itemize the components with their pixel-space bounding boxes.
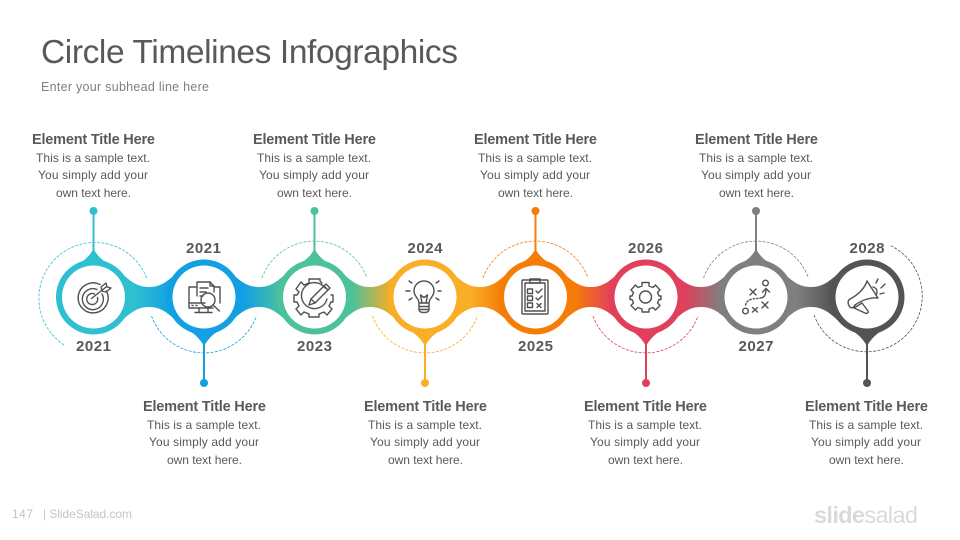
icon: strategy play xyxy=(743,280,770,314)
node 7 xyxy=(718,207,794,334)
icon: monitor with magnifier xyxy=(189,282,220,312)
text block 1 xyxy=(32,132,155,200)
text block 2 xyxy=(143,399,266,467)
text block 7: own text here. xyxy=(719,186,794,200)
icon: checklist clipboard xyxy=(522,279,548,314)
year labels: 2024 xyxy=(408,240,443,257)
text block 4: This is a sample text. xyxy=(368,418,482,432)
connector band xyxy=(122,273,838,321)
text block 1: This is a sample text. xyxy=(36,151,150,165)
text block 6: You simply add your xyxy=(590,435,700,449)
text block 3: You simply add your xyxy=(259,168,369,182)
text block 6 xyxy=(584,399,707,467)
text block 6: own text here. xyxy=(608,453,683,467)
text block 7 xyxy=(695,132,818,200)
icon: target xyxy=(78,283,111,313)
text block 4: own text here. xyxy=(388,453,463,467)
text block 5: Element Title Here xyxy=(474,132,597,148)
footer page number and site: | SlideSalad.com xyxy=(43,507,132,521)
dashed arcs xyxy=(39,241,922,353)
node 4 xyxy=(388,260,462,387)
subhead: Enter your subhead line here xyxy=(41,80,209,94)
text block 4: You simply add your xyxy=(370,435,480,449)
text block 4: Element Title Here xyxy=(364,399,487,415)
text block 8: own text here. xyxy=(829,453,904,467)
text block 8: This is a sample text. xyxy=(809,418,923,432)
logo wordmark: slidesalad xyxy=(814,502,918,528)
text block 5: This is a sample text. xyxy=(478,151,592,165)
text block 6: This is a sample text. xyxy=(588,418,702,432)
node 6 xyxy=(608,260,684,387)
year labels: 2025 xyxy=(518,338,553,355)
text block 1: Element Title Here xyxy=(32,132,155,148)
icon: light bulb xyxy=(406,281,441,312)
text block 1: You simply add your xyxy=(38,168,148,182)
text block 5: You simply add your xyxy=(480,168,590,182)
text block 2: You simply add your xyxy=(149,435,259,449)
text block 2: This is a sample text. xyxy=(147,418,261,432)
text block 1: own text here. xyxy=(56,186,131,200)
icon: gear with pencil xyxy=(294,279,333,317)
text block 2: own text here. xyxy=(167,453,242,467)
text block 3: Element Title Here xyxy=(253,132,376,148)
text block 8 xyxy=(805,399,928,467)
footer page number and site: 147 xyxy=(12,507,33,521)
node 8 xyxy=(830,260,904,387)
year labels: 2023 xyxy=(297,338,332,355)
year labels: 2027 xyxy=(738,338,774,355)
year labels: 2026 xyxy=(628,240,663,257)
year labels xyxy=(76,240,884,355)
icon: megaphone xyxy=(848,279,885,313)
text block 8: You simply add your xyxy=(811,435,921,449)
text block 6: Element Title Here xyxy=(584,399,707,415)
text block 5: own text here. xyxy=(498,186,573,200)
text block 3 xyxy=(253,132,376,200)
text block 3: This is a sample text. xyxy=(257,151,371,165)
year labels: 2021 xyxy=(76,338,111,355)
title: Circle Timelines Infographics xyxy=(41,34,458,71)
text block 5 xyxy=(474,132,597,200)
text block 7: Element Title Here xyxy=(695,132,818,148)
text block 4 xyxy=(364,399,487,467)
text block 3: own text here. xyxy=(277,186,352,200)
text block 7: You simply add your xyxy=(701,168,811,182)
icon: gear xyxy=(630,282,661,312)
text block 8: Element Title Here xyxy=(805,399,928,415)
text block 7: This is a sample text. xyxy=(699,151,813,165)
year labels: 2028 xyxy=(850,240,884,257)
year labels: 2021 xyxy=(186,240,221,257)
text block 2: Element Title Here xyxy=(143,399,266,415)
node 1 xyxy=(56,207,131,334)
node 3 xyxy=(277,207,352,334)
node 5 xyxy=(498,207,573,334)
node 2 xyxy=(166,260,242,387)
